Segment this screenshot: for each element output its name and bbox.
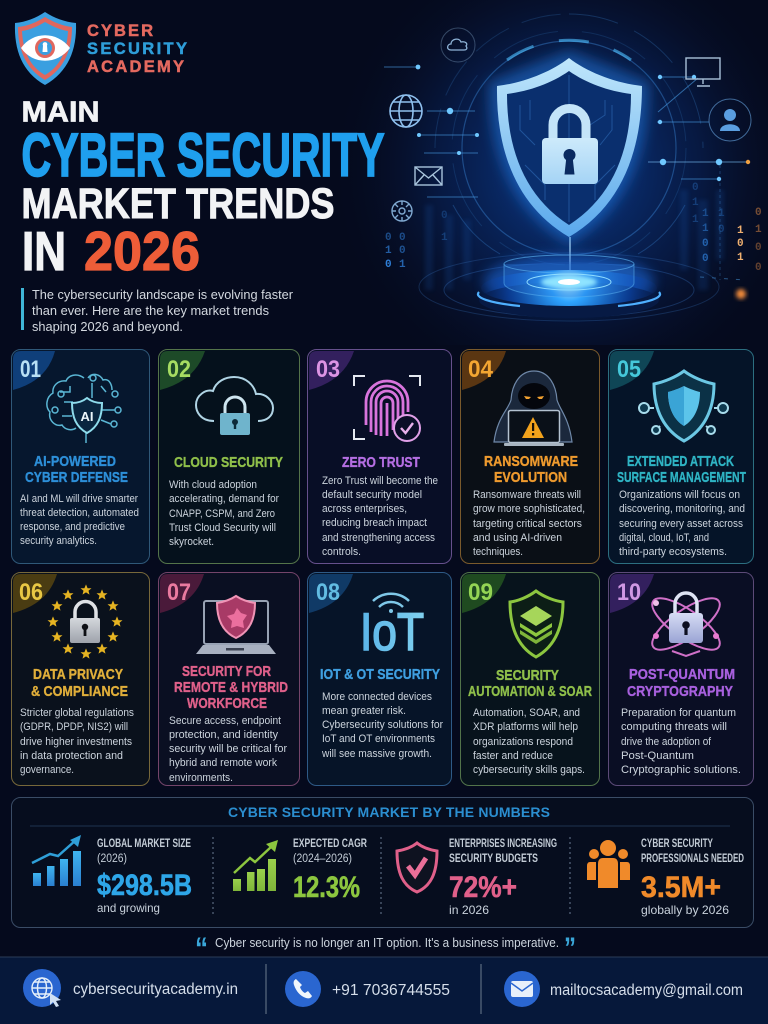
stat: global market size: (2026) bbox=[97, 853, 127, 865]
description bbox=[20, 493, 139, 547]
phone contact bbox=[285, 971, 450, 1007]
heading bbox=[627, 667, 735, 700]
description: Ransomware threats will bbox=[473, 489, 581, 501]
icon: shield with nodes bbox=[639, 371, 728, 441]
panel: 03 zero trust bbox=[308, 350, 452, 564]
title: CYBER SECURITY bbox=[22, 121, 384, 189]
panel: 08 IoT and OT security bbox=[308, 572, 452, 786]
description: security analytics. bbox=[20, 535, 97, 547]
heading: & COMPLIANCE bbox=[31, 684, 128, 700]
description bbox=[322, 475, 438, 558]
intro text block bbox=[21, 287, 294, 334]
description: and using AI-driven bbox=[473, 532, 562, 544]
binary digits: 1 bbox=[441, 232, 448, 244]
website contact bbox=[23, 969, 238, 1007]
stat: expected CAGR: (2024–2026) bbox=[293, 853, 352, 865]
binary digits: 0 bbox=[692, 182, 699, 194]
panel: 06 data privacy and compliance bbox=[12, 572, 150, 786]
description: hybrid and remote work bbox=[169, 757, 277, 769]
binary digits: 1 bbox=[385, 245, 392, 257]
icon: people bbox=[587, 840, 630, 888]
icon: AI brain bbox=[47, 374, 121, 443]
panel: 02 cloud security bbox=[158, 350, 300, 564]
platform bbox=[419, 253, 746, 321]
icon: lock with stars bbox=[48, 584, 122, 659]
binary digits bbox=[385, 182, 762, 274]
heading: CRYPTOGRAPHY bbox=[627, 684, 733, 700]
description: techniques. bbox=[473, 546, 523, 558]
binary digits: 0 bbox=[385, 259, 392, 271]
binary digits: 0 bbox=[702, 253, 709, 265]
intro text block: The cybersecurity landscape is evolving faster bbox=[32, 287, 294, 302]
website contact: cybersecurityacademy.in bbox=[73, 981, 238, 998]
icon: envelope bbox=[415, 167, 442, 185]
description: security will be critical for bbox=[169, 743, 287, 755]
icon: padlock bbox=[542, 109, 598, 184]
icon: user bbox=[709, 99, 751, 141]
binary digits: 1 bbox=[702, 208, 709, 220]
heading: ZERO TRUST bbox=[342, 455, 420, 471]
panel: 09 security automation and SOAR bbox=[460, 572, 600, 786]
binary digits: 1 bbox=[702, 223, 709, 235]
heading: SECURITY FOR bbox=[182, 664, 271, 680]
icon: globe bbox=[390, 95, 422, 127]
description: skyrocket. bbox=[169, 536, 214, 548]
description: targeting critical sectors bbox=[473, 518, 582, 530]
description: Zero Trust will become the bbox=[322, 475, 438, 487]
panel: 08 IoT and OT security: 08 bbox=[316, 579, 340, 606]
description: discovering, monitoring, and bbox=[619, 503, 745, 515]
description: Cybersecurity solutions for bbox=[322, 719, 443, 731]
stat: professionals needed: 3.5M+ bbox=[641, 871, 721, 904]
panel: 06 data privacy and compliance: 06 bbox=[19, 579, 43, 606]
icon: cloud bbox=[441, 28, 475, 62]
title: MAIN bbox=[22, 96, 100, 128]
logo: Cyber Security Academy: ACADEMY bbox=[87, 58, 184, 76]
hero illustration: shield and lock bbox=[384, 14, 762, 321]
heading bbox=[468, 668, 592, 700]
description: drive the adoption of bbox=[621, 736, 712, 748]
stat: global market size bbox=[32, 835, 192, 915]
stat: enterprises increasing budgets: 72%+ bbox=[449, 871, 517, 904]
description: threat detection, automated bbox=[20, 507, 139, 519]
panel: 07 security for remote and hybrid workforce: 07 bbox=[167, 579, 191, 606]
icon: monitor bbox=[686, 58, 720, 86]
description: accelerating, demand for bbox=[169, 493, 279, 505]
email contact bbox=[504, 971, 743, 1007]
stat: enterprises increasing budgets: ENTERPRISES INCREASING bbox=[449, 838, 557, 850]
heading bbox=[25, 454, 128, 486]
icon: blue growth chart bbox=[32, 835, 81, 886]
description: Preparation for quantum bbox=[621, 707, 736, 719]
description: (GDPR, DPDP, NIS2) will bbox=[20, 721, 128, 733]
icon: shield with layers bbox=[510, 591, 563, 657]
stat: expected CAGR: 12.3% bbox=[293, 871, 360, 904]
binary digits: 0 bbox=[441, 210, 448, 222]
description: reducing breach impact bbox=[322, 517, 428, 529]
heading: REMOTE & HYBRID bbox=[174, 680, 288, 696]
description: third-party ecosystems. bbox=[619, 546, 727, 558]
description: and strengthening access bbox=[322, 532, 435, 544]
description: faster and reduce bbox=[473, 750, 553, 762]
binary digits: 1 bbox=[692, 197, 699, 209]
title bbox=[22, 96, 384, 282]
description: Stricter global regulations bbox=[20, 707, 134, 719]
description bbox=[473, 707, 585, 776]
heading: IOT & OT SECURITY bbox=[320, 667, 440, 683]
description bbox=[169, 479, 279, 548]
description: Secure access, endpoint bbox=[169, 715, 282, 727]
description: cybersecurity skills gaps. bbox=[473, 764, 585, 776]
shield bbox=[488, 50, 650, 245]
description bbox=[321, 691, 443, 760]
heading bbox=[484, 454, 578, 486]
heading: POST-QUANTUM bbox=[629, 667, 735, 683]
heading: RANSOMWARE bbox=[484, 454, 578, 470]
heading: EVOLUTION bbox=[494, 470, 567, 486]
quote bbox=[195, 932, 576, 965]
logo: Cyber Security Academy bbox=[15, 12, 187, 85]
description bbox=[20, 707, 134, 776]
stats heading: CYBER SECURITY MARKET BY THE NUMBERS bbox=[228, 804, 550, 820]
panel: 01 AI-powered cyber defense bbox=[12, 350, 150, 564]
panel: 09 security automation and SOAR: 09 bbox=[468, 579, 493, 606]
panel: 10 post-quantum cryptography: 10 bbox=[617, 579, 641, 606]
panel: 10 post-quantum cryptography bbox=[608, 572, 754, 786]
logo: Cyber Security Academy: CYBER bbox=[87, 22, 153, 40]
description: drive higher investments bbox=[20, 736, 132, 748]
phone contact: +91 7036744555 bbox=[332, 982, 450, 999]
binary digits: 0 bbox=[385, 232, 392, 244]
description: CNAPP, CSPM, and Zero bbox=[169, 508, 275, 520]
binary digits: 0 bbox=[755, 207, 762, 219]
stat: professionals needed: globally by 2026 bbox=[641, 903, 729, 917]
heading: SECURITY bbox=[496, 668, 559, 684]
description bbox=[473, 489, 585, 558]
heading: CLOUD SECURITY bbox=[174, 455, 283, 471]
heading: EXTENDED ATTACK bbox=[627, 454, 734, 470]
heading: CYBER DEFENSE bbox=[25, 470, 128, 486]
description: will see massive growth. bbox=[321, 748, 432, 760]
icon: gear bbox=[392, 201, 412, 221]
binary digits: 1 bbox=[718, 208, 725, 220]
email contact: mailtocsacademy@gmail.com bbox=[550, 982, 743, 999]
binary digits: 0 bbox=[399, 245, 406, 257]
description: IoT and OT environments bbox=[322, 733, 435, 745]
description bbox=[169, 715, 287, 784]
binary digits: 0 bbox=[718, 224, 725, 236]
quote: ” bbox=[564, 932, 576, 965]
binary streams glow bbox=[425, 190, 724, 290]
description: across enterprises, bbox=[322, 503, 407, 515]
icon: fingerprint bbox=[354, 376, 420, 441]
intro text block: shaping 2026 and beyond. bbox=[32, 319, 183, 334]
stat: expected CAGR bbox=[233, 838, 368, 904]
description: securing every asset across bbox=[619, 518, 743, 530]
binary digits: 0 bbox=[755, 262, 762, 274]
description: governance. bbox=[20, 764, 74, 776]
icon: cloud lock bbox=[196, 377, 273, 435]
icon: hacker with laptop bbox=[494, 371, 572, 446]
stat: global market size: $298.5B bbox=[97, 869, 192, 902]
description: digital, cloud, IoT, and bbox=[619, 532, 709, 544]
description: in data protection and bbox=[20, 750, 123, 762]
panel: 05 extended attack surface management bbox=[608, 350, 754, 564]
heading: WORKFORCE bbox=[187, 696, 267, 712]
description: response, and predictive bbox=[20, 521, 125, 533]
binary digits: 1 bbox=[755, 224, 762, 236]
description: Trust Cloud Security will bbox=[169, 522, 276, 534]
title: IN bbox=[22, 220, 66, 282]
stat: enterprises increasing budgets bbox=[397, 838, 557, 917]
panel: 02 cloud security: 02 bbox=[167, 356, 191, 383]
heading: AUTOMATION & SOAR bbox=[468, 684, 592, 700]
binary digits: 1 bbox=[399, 259, 406, 271]
connector lines bbox=[384, 65, 750, 282]
binary digits: 0 bbox=[399, 232, 406, 244]
footer bbox=[0, 957, 768, 1024]
circuit rings bbox=[435, 14, 703, 265]
quote: “ bbox=[195, 932, 208, 965]
intro text block: than ever. Here are the key market trends bbox=[32, 303, 269, 318]
stat: enterprises increasing budgets: SECURITY BUDGETS bbox=[449, 853, 538, 865]
description bbox=[621, 707, 741, 776]
binary digits: 1 bbox=[737, 252, 744, 264]
binary digits: 1 bbox=[692, 214, 699, 226]
stat: expected CAGR: EXPECTED CAGR bbox=[293, 838, 368, 850]
heading: DATA PRIVACY bbox=[33, 667, 123, 683]
icon: green growth chart bbox=[233, 840, 278, 891]
heading: AI-POWERED bbox=[34, 454, 116, 470]
stat: global market size: and growing bbox=[97, 901, 160, 915]
stat: professionals needed bbox=[587, 838, 744, 917]
title: MARKET TRENDS bbox=[22, 180, 334, 228]
description: With cloud adoption bbox=[169, 479, 257, 491]
binary digits: 0 bbox=[702, 238, 709, 250]
description: Automation, SOAR, and bbox=[473, 707, 580, 719]
description: computing threats will bbox=[621, 721, 727, 733]
stat: professionals needed: CYBER SECURITY bbox=[641, 838, 713, 850]
description: More connected devices bbox=[322, 691, 432, 703]
description: controls. bbox=[322, 546, 361, 558]
panel: 01 AI-powered cyber defense: 01 bbox=[20, 356, 41, 383]
stat: global market size: GLOBAL MARKET SIZE bbox=[97, 838, 191, 850]
quote: Cyber security is no longer an IT option. It's a business imperative. bbox=[215, 936, 559, 950]
panel: 07 security for remote and hybrid workforce bbox=[158, 572, 300, 786]
description: XDR platforms will help bbox=[473, 721, 578, 733]
description: AI and ML will drive smarter bbox=[20, 493, 138, 505]
description: grow more sophisticated, bbox=[473, 503, 585, 515]
binary digits: 0 bbox=[737, 238, 744, 250]
description: mean greater risk. bbox=[322, 705, 406, 717]
description: Post-Quantum bbox=[621, 750, 694, 762]
heading bbox=[31, 667, 128, 700]
binary digits: 1 bbox=[737, 225, 744, 237]
icon: IoT wifi: IoT bbox=[360, 603, 424, 662]
heading bbox=[617, 454, 746, 486]
description: default security model bbox=[322, 489, 422, 501]
panel: 05 extended attack surface management: 05 bbox=[617, 356, 641, 383]
icon: atom lock bbox=[645, 590, 727, 658]
description bbox=[619, 489, 745, 558]
stat: enterprises increasing budgets: in 2026 bbox=[449, 903, 489, 917]
panel: 04 ransomware evolution bbox=[460, 350, 600, 564]
binary digits: 0 bbox=[755, 242, 762, 254]
description: protection, and identity bbox=[169, 729, 278, 741]
panel: 04 ransomware evolution: 04 bbox=[468, 356, 494, 383]
icon: laptop shield bbox=[196, 596, 276, 654]
heading bbox=[174, 664, 288, 712]
description: Organizations will focus on bbox=[619, 489, 740, 501]
description: Cryptographic solutions. bbox=[621, 764, 741, 776]
panel: 03 zero trust: 03 bbox=[316, 356, 340, 383]
title: 2026 bbox=[84, 220, 200, 282]
icon: AI brain: AI bbox=[80, 409, 94, 424]
panel: market by the numbers bbox=[12, 798, 754, 928]
description: environments. bbox=[169, 772, 233, 784]
logo: Cyber Security Academy: SECURITY bbox=[87, 40, 187, 58]
description: organizations respond bbox=[473, 736, 573, 748]
icon: pink check shield bbox=[397, 843, 437, 892]
